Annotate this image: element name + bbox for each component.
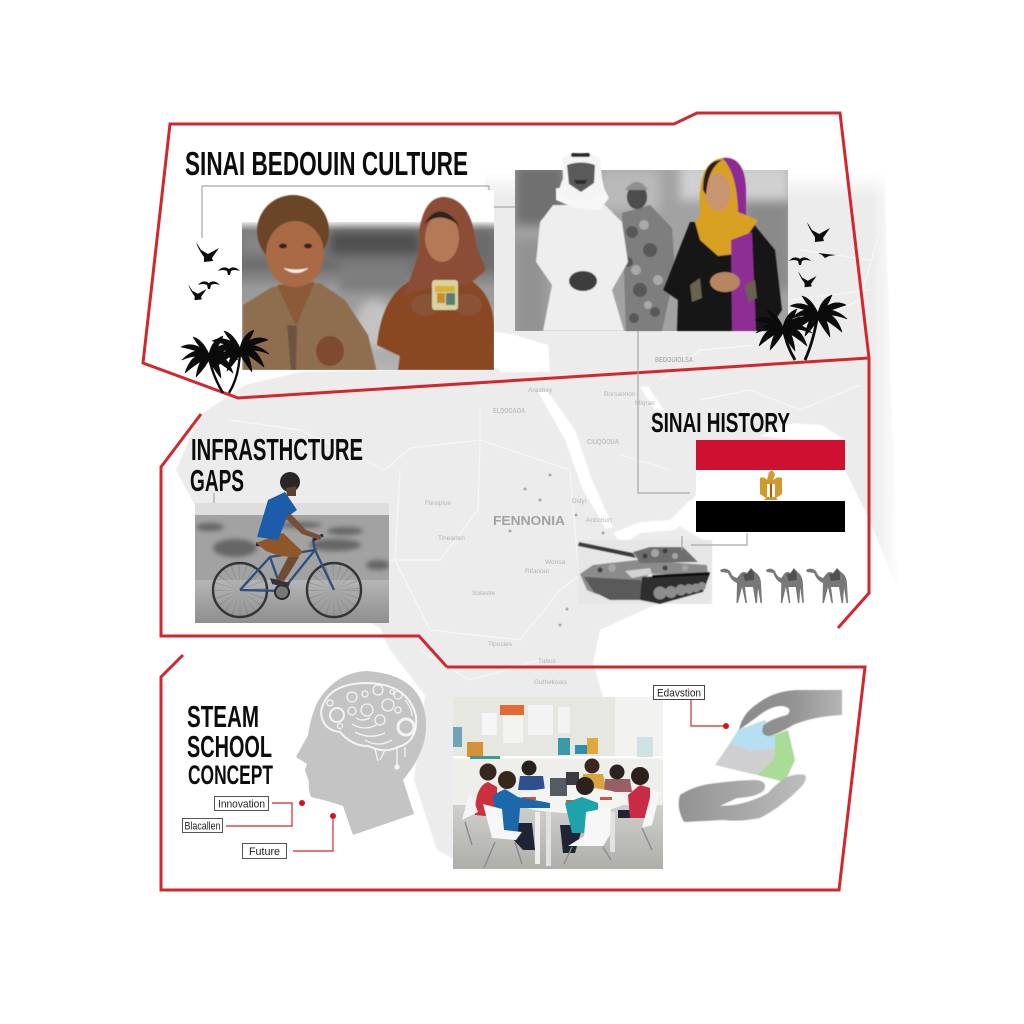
map place labels: Wonsa <box>545 559 565 566</box>
icon: head with brain <box>296 671 426 835</box>
map background: Africa and Arabia <box>176 150 912 858</box>
map place labels: FENNONIA <box>493 513 566 528</box>
icon: birds left <box>188 242 240 300</box>
photo: adults in traditional dress with soldier <box>515 165 790 336</box>
brain <box>321 683 416 769</box>
icon: palm trees left <box>181 330 269 393</box>
map place labels: Tineaden <box>438 535 465 542</box>
heading: Sinai History: SINAI HISTORY <box>651 407 790 438</box>
boy <box>243 195 376 370</box>
map place labels: Dslyr <box>572 498 588 505</box>
label: Future: Future <box>249 846 280 858</box>
back-row children <box>475 758 650 818</box>
photo: Bedouin children <box>242 190 494 370</box>
label: Future <box>242 844 286 858</box>
girl <box>377 197 494 370</box>
map place labels <box>425 357 693 686</box>
photo: boy on bicycle <box>195 503 390 623</box>
icon: eagle of Saladin <box>760 470 782 500</box>
illustration: hands holding Sinai map <box>679 690 842 822</box>
heading: Infrastructure Gaps <box>190 432 363 498</box>
bicycle <box>213 535 361 617</box>
callout lines and dots <box>226 700 729 851</box>
heading: STEAM School Concept: CONCEPT <box>188 760 273 790</box>
map piece <box>715 720 795 782</box>
map place labels: Tiposies <box>488 641 513 648</box>
panel frame: Infrastructure Gaps and Sinai History <box>161 358 869 667</box>
woman with yellow scarf <box>663 158 782 331</box>
photo: tank <box>578 540 712 604</box>
table and laptops <box>522 772 622 866</box>
heading: Infrastructure Gaps: INFRASTHCTURE <box>191 432 363 467</box>
photo: children in classroom <box>453 697 663 869</box>
front children and chairs <box>462 771 660 853</box>
tank barrel <box>578 542 636 558</box>
upper hand <box>739 690 842 736</box>
map place labels: Solastie <box>472 590 496 597</box>
connector lines: upper panel <box>202 186 690 493</box>
bicycle and rider <box>213 472 361 617</box>
map place labels: Anbchurt <box>586 517 612 524</box>
icon: camels <box>720 568 848 603</box>
map place labels: Flesipiue <box>425 500 451 507</box>
icon: birds right <box>789 222 836 287</box>
flag of Egypt <box>696 440 845 532</box>
seas <box>493 332 845 545</box>
map place labels: Guthekoals <box>534 679 568 686</box>
tank tracks and wheels <box>640 574 710 604</box>
lower hand <box>679 774 806 822</box>
map place labels: Miqrae <box>635 400 655 407</box>
map place labels: Tubus <box>538 658 557 665</box>
label: Innovation: Innovation <box>218 798 265 810</box>
connector: bike photo <box>213 493 215 515</box>
map place labels: CIUQOOUA <box>587 439 619 446</box>
heading: STEAM School Concept: STEAM <box>187 699 259 734</box>
heading: STEAM School Concept <box>187 699 273 790</box>
map place labels: ELDOOAOA <box>493 408 525 415</box>
tank hull <box>580 560 708 598</box>
title: Sinai Bedouin Culture: SINAI BEDOUIN CULTURE <box>185 145 468 182</box>
label: Blacallen: Blacallen <box>184 820 220 832</box>
tank turret <box>633 547 698 563</box>
map place labels: Araabey <box>528 387 553 394</box>
connector lines: flag to tank <box>682 533 747 550</box>
label: Education: Edavstion <box>657 688 701 700</box>
rider <box>256 472 322 588</box>
map place labels: Borsaonon <box>604 391 636 398</box>
icon: palm trees right <box>755 295 847 360</box>
heading: STEAM School Concept: SCHOOL <box>187 729 272 764</box>
man in white thobe <box>536 152 628 331</box>
soldier <box>622 182 675 331</box>
classroom wall posters <box>453 705 653 759</box>
panel frame: STEAM School Concept <box>161 655 865 890</box>
map place labels: BEDOUIOLSA <box>655 357 693 364</box>
figures: man, soldier and woman <box>536 152 782 331</box>
panel frame: Sinai Bedouin Culture <box>143 113 869 398</box>
map place labels: Rifanour <box>525 568 550 575</box>
heading: Infrastructure Gaps: GAPS <box>190 463 244 498</box>
